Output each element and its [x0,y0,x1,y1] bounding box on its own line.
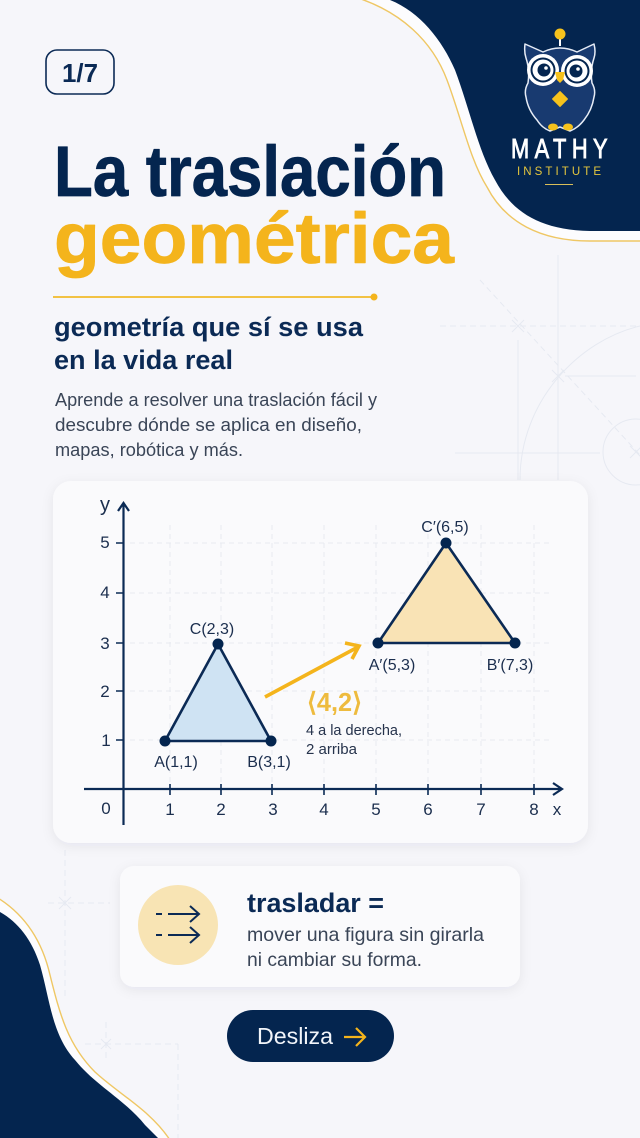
vertex labels [154,519,533,771]
axis labels: 4 [100,583,110,602]
axis labels: 1 [101,731,111,750]
definition text [247,924,484,971]
axis labels: 3 [268,800,278,819]
definition heading: trasladar = [247,888,384,918]
logo: Mathy Institute [511,28,613,185]
axis labels: 8 [529,800,539,819]
axis labels: x [553,800,562,819]
icon: owl [525,28,595,131]
vertex labels: B(3,1) [247,754,291,771]
axis labels: 5 [100,533,110,552]
subtitle: geometría que sí se usa [54,312,363,342]
title [54,133,455,279]
logo wordmark: MATHY [511,133,613,165]
logo subtitle: INSTITUTE [517,166,601,178]
axis labels: 6 [423,800,433,819]
page badge 1/7: 1/7 [62,58,98,88]
intro text [55,389,378,460]
subtitle: en la vida real [54,345,233,375]
intro text: mapas, robótica y más. [55,439,243,460]
axis labels: 2 [100,682,110,701]
vertex labels: B′(7,3) [487,657,533,674]
axis labels [100,494,562,819]
vector description: 2 arriba [306,742,358,758]
vector description: 4 a la derecha, [306,723,402,739]
intro text: descubre dónde se aplica en diseño, [55,414,362,435]
button: desliza [227,1010,394,1062]
intro text: Aprende a resolver una traslación fácil y [55,389,378,410]
top right navy corner shape [358,0,640,241]
bottom left navy corner shape [0,898,170,1138]
title: La traslación [54,133,446,212]
subtitle [54,312,363,375]
axis labels: 1 [165,800,175,819]
axis labels: 7 [476,800,486,819]
vector label: ⟨4,2⟩ [307,687,362,717]
definition text: ni cambiar su forma. [247,949,422,971]
panel: definition [120,866,520,987]
axis labels: 0 [101,799,111,818]
icon: translation arrows [138,885,218,965]
axis labels: 4 [319,800,329,819]
triangle A'B'C' [372,538,520,648]
panel: coordinate chart [53,481,588,843]
title: geométrica [54,200,455,279]
axis labels: 2 [216,800,226,819]
vertex labels: C′(6,5) [421,519,469,536]
title divider [53,294,378,300]
vector description [306,723,402,758]
axes [84,503,562,825]
axis labels: y [100,494,110,516]
axis labels: 5 [371,800,381,819]
arrow: translation vector [265,643,359,697]
vertex labels: C(2,3) [190,621,234,638]
vertex labels: A(1,1) [154,754,198,771]
vertex labels: A′(5,3) [369,657,415,674]
button: desliza: Desliza [257,1023,334,1049]
page badge 1/7 [46,50,114,94]
icon: button arrow [344,1028,365,1046]
triangle ABC [160,638,276,746]
definition text: mover una figura sin girarla [247,924,484,946]
axis labels: 3 [100,634,110,653]
